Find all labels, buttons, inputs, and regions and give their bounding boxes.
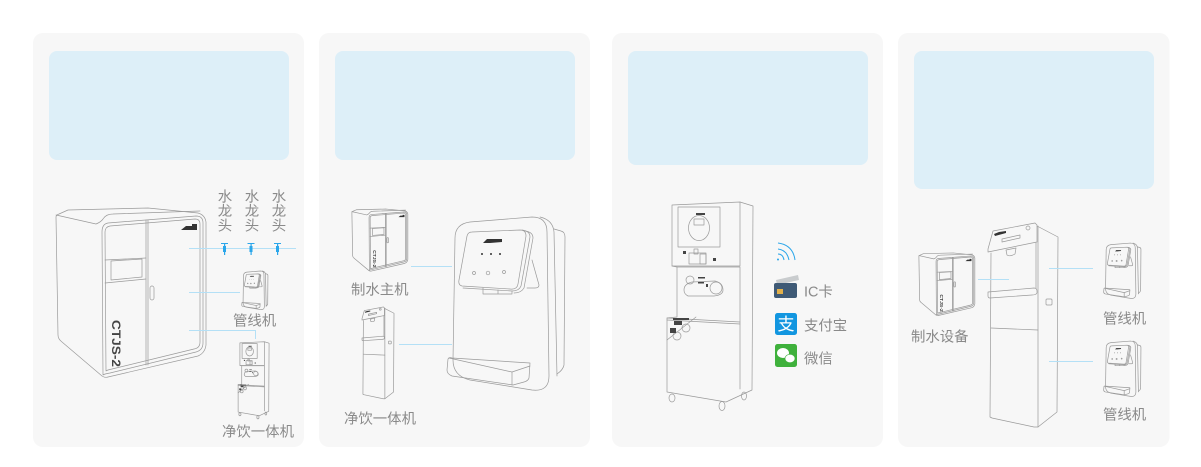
label: faucet 1: 水 <box>218 190 232 206</box>
connector lines: panel 1 <box>189 248 296 339</box>
label: faucet 3: 龙 <box>272 203 286 220</box>
label: faucet 2: 龙 <box>245 203 259 220</box>
label: faucet 2: 头 <box>245 218 259 234</box>
illustration: panel 1 all-in-one unit <box>238 342 269 419</box>
illustration: panel 2 all-in-one unit <box>362 307 394 399</box>
icon: IC card <box>774 275 799 298</box>
label: faucet 3: 水 <box>272 190 286 206</box>
illustration: panel 1 water-making cabinet <box>56 208 206 377</box>
label: Alipay: 支付宝 <box>804 318 847 334</box>
illustration: panel 3 payment kiosk <box>667 202 753 410</box>
connector lines: panel 4 <box>978 268 1093 362</box>
icon: contactless <box>777 243 795 260</box>
illustration: panel 4 water-making equipment <box>919 253 975 316</box>
label: pipeline unit: 管线机 <box>233 312 277 330</box>
label: faucet 1: 头 <box>218 218 232 234</box>
text box: panel 2 blue block <box>335 51 575 160</box>
illustration: panel 2 large pipeline unit <box>447 217 565 390</box>
icon: Alipay <box>775 313 797 335</box>
text box: panel 3 blue block <box>628 51 868 165</box>
label: panel 2 all-in-one unit: 净饮一体机 <box>344 410 417 428</box>
illustration: panel 4 pipeline unit top <box>1104 243 1141 298</box>
illustration: panel 4 tall dispenser <box>988 223 1058 427</box>
panel: panel 4 <box>898 33 1170 447</box>
label: water-making host: 制水主机 <box>351 282 409 298</box>
label: IC card: IC卡 <box>804 284 833 300</box>
text box: panel 1 blue block <box>49 51 289 160</box>
label: all-in-one unit: 净饮一体机 <box>222 424 295 440</box>
label: faucet 3: 头 <box>272 218 286 234</box>
text box: panel 4 blue block <box>914 51 1154 189</box>
label: faucet 2: 水 <box>245 190 259 206</box>
icon: Alipay: 支 <box>778 315 794 334</box>
illustration: panel 1 pipeline unit <box>242 271 268 310</box>
icon: WeChat <box>775 344 797 367</box>
panel: panel 1 <box>33 33 304 447</box>
icon: faucets <box>221 243 281 255</box>
label: faucet 1: 龙 <box>218 203 232 220</box>
panel: panel 2 <box>319 33 590 447</box>
label: pipeline unit top: 管线机 <box>1103 310 1147 328</box>
label: pipeline unit bottom: 管线机 <box>1103 406 1147 424</box>
panel: panel 3 <box>612 33 883 447</box>
label: water-making equipment: 制水设备 <box>911 328 969 346</box>
illustration: panel 2 water-making host <box>352 209 408 271</box>
connector lines: panel 2 <box>399 266 452 344</box>
illustration: panel 4 pipeline unit bottom <box>1104 341 1141 396</box>
label: WeChat: 微信 <box>804 350 833 368</box>
